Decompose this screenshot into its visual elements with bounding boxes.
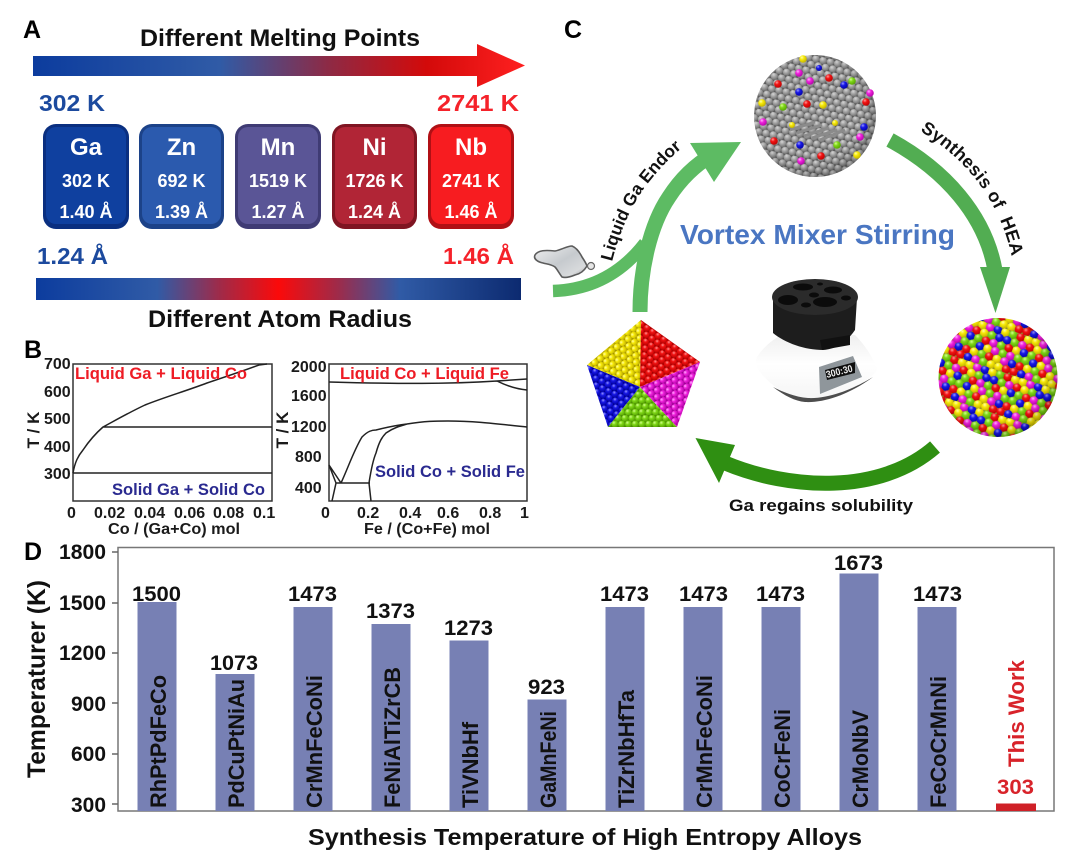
label D: D [24,538,42,566]
element card: Ni: Ni [362,134,386,161]
element card: Ni: 1.24 Å [348,202,401,222]
bar: this work 303: This Work [1004,659,1029,767]
chart: Ga-Co phase diagram: 500 [44,411,71,428]
chart: Co-Fe phase diagram: 800 [295,449,322,466]
panel D: synthesis temperature bar chart [23,538,1054,850]
element card: Zn [139,124,224,229]
chart: Ga-Co phase diagram: Liquid Ga + Liquid Co [75,365,247,383]
chart: Ga-Co phase diagram: 600 [44,384,71,401]
heading: different atom radius: Different Atom Radius [148,306,412,333]
bar: FeNiAlTiZrCB 1373: 1373 [366,600,415,623]
bar: RhPtPdFeCo 1500: 1500 [132,583,181,606]
bar: CrMoNbV 1673: CrMoNbV [848,710,873,808]
bar: TiVNbHf 1273 [444,617,493,811]
chart: Co-Fe phase diagram: 1600 [291,388,327,405]
chart: Ga-Co phase diagram: 300 [44,466,71,483]
bar: PdCuPtNiAu 1073: PdCuPtNiAu [224,679,249,808]
bar: CrMnFeCoNi 1473: 1473 [288,583,337,606]
chart: Co-Fe phase diagram: 0.8 [479,505,501,522]
element card: Ga: 1.40 Å [59,202,113,222]
bar: TiVNbHf 1273: 1273 [444,617,493,640]
element card: Zn: 692 K [157,171,206,191]
chart: Ga-Co phase diagram: 400 [44,439,71,456]
panel A: melting points and atom radius [23,16,525,333]
element card: Nb: 2741 K [442,171,500,191]
chart: Ga-Co phase diagram: 0 [67,505,76,522]
element card: Mn: 1519 K [249,171,307,191]
chart: Ga-Co phase diagram: 0.08 [213,505,244,522]
chart: Ga-Co phase diagram: 700 [44,356,71,373]
chart: Co-Fe phase diagram: 1200 [291,419,327,436]
icon: liquid gallium droplet [535,246,594,277]
chart: Co-Fe phase diagram: T / K [273,411,292,448]
chart: Co-Fe phase diagram: Fe / (Co+Fe) mol [364,521,490,538]
chart: Co-Fe phase diagram: Liquid Co + Liquid Fe [340,365,509,383]
arrow: melting point gradient [33,44,525,87]
y axis tick labels: 1200 [59,642,106,665]
bar: GaMnFeNi 923: GaMnFeNi [536,711,561,808]
chart: Ga-Co phase diagram: T / K [24,411,43,448]
chart: Ga-Co phase diagram: 0.02 [94,505,125,522]
label: Ga regains solubility: Ga regains solubility [729,496,914,515]
y axis tick labels: 600 [71,743,106,766]
bar: PdCuPtNiAu 1073: 1073 [210,652,258,675]
element card: Ni [332,124,417,229]
label B: B [24,336,42,364]
bar: PdCuPtNiAu 1073 [210,652,258,811]
bar: CoCrFeNi 1473 [756,583,805,811]
panel B: phase diagrams [24,336,529,538]
bar: CrMoNbV 1673: 1673 [834,552,883,575]
bar: this work 303 [996,659,1036,811]
y axis tick labels: 300 [71,794,106,817]
bar: CrMnFeCoNi 1473 [288,583,337,811]
high atom radius value: 1.46 Å [443,242,514,269]
icon: vortex mixer: 300:30 [825,364,854,381]
heading: different melting points: Different Melting Points [140,25,420,52]
element card: Nb [428,124,514,229]
chart: Co-Fe phase diagram: 0.6 [437,505,459,522]
bar: TiVNbHf 1273: TiVNbHf [458,721,483,808]
bar: GaMnFeNi 923 [528,676,566,811]
bar: this work 303: 303 [997,776,1034,799]
y axis ticks [112,552,118,804]
bar: CrMnFeCoNi 1473 second [679,583,728,811]
arrow: Ga regains solubility [696,438,935,483]
element card: Mn [235,124,321,229]
chart: Ga-Co phase diagram: 0.06 [174,505,205,522]
bar: CrMnFeCoNi 1473 second: CrMnFeCoNi [692,675,717,808]
element card: Nb: Nb [455,134,487,161]
chart: Co-Fe phase diagram: Solid Co + Solid Fe [375,463,525,481]
chart: Ga-Co phase diagram [24,356,275,538]
bar: CrMoNbV 1673 [834,552,883,811]
bar: TiZrNbHfTa 1473 [600,583,649,811]
chart: Co-Fe phase diagram: 0 [321,505,330,522]
bar: FeNiAlTiZrCB 1373 [366,600,415,811]
element card: Nb: 1.46 Å [444,202,498,222]
bar: CoCrFeNi 1473: 1473 [756,583,805,606]
chart frame [118,548,1054,811]
element card: Ga: 302 K [62,171,110,191]
chart: Co-Fe phase diagram [273,359,529,538]
low melting point value: 302 K [39,90,105,116]
chart: Ga-Co phase diagram: Solid Ga + Solid Co [112,481,265,499]
element card: Ni: 1726 K [345,171,404,191]
chart: Co-Fe phase diagram: 0.2 [357,505,379,522]
chart: Co-Fe phase diagram: 1 [520,505,529,522]
arrow: synthesis of HEA [890,140,1010,313]
bar: TiZrNbHfTa 1473: TiZrNbHfTa [614,689,639,808]
chart: Ga-Co phase diagram: Co / (Ga+Co) mol [108,521,240,538]
bar: CrMnFeCoNi 1473: CrMnFeCoNi [302,675,327,808]
element card: Mn: 1.27 Å [251,202,305,222]
bar: FeCoCrMnNi 1473: 1473 [913,583,962,606]
high melting point value: 2741 K [437,90,519,116]
multicolour high entropy alloy sphere [938,318,1058,437]
element card: Zn: 1.39 Å [155,202,208,222]
bar: GaMnFeNi 923: 923 [528,676,565,699]
grey nanoparticle sphere [754,55,876,177]
panel C: vortex mixer synthesis cycle [534,16,1058,515]
label C: C [564,16,582,44]
bar: RhPtPdFeCo 1500 [132,583,181,811]
title: vortex mixer stirring: Vortex Mixer Stirring [680,219,955,250]
chart: Co-Fe phase diagram: 400 [295,480,322,497]
x axis title: Synthesis Temperature of High Entropy Alloys [308,824,862,850]
element card: Zn: Zn [167,134,196,161]
label: liquid Ga endor: Liquid Ga Endor [600,141,680,261]
bar: TiZrNbHfTa 1473: 1473 [600,583,649,606]
low atom radius value: 1.24 Å [37,242,108,269]
y axis tick labels: 900 [71,693,106,716]
y axis tick labels: 1800 [59,541,106,564]
atom radius gradient bar [36,278,521,300]
label: synthesis of HEA: Synthesis of HEA [922,122,1022,256]
bar: FeCoCrMnNi 1473 [913,583,962,811]
segmented pentagon nanoparticle [587,320,700,427]
y axis title: Temperaturer (K) [23,580,51,778]
icon: vortex mixer [756,279,877,402]
chart: Co-Fe phase diagram: 0.4 [399,505,421,522]
label A: A [23,16,41,44]
chart: Ga-Co phase diagram: 0.04 [134,505,165,522]
element card: Ga: Ga [70,134,103,161]
arrow: liquid Ga endor [553,142,741,312]
bar: FeNiAlTiZrCB 1373: FeNiAlTiZrCB [380,667,405,808]
bar: FeCoCrMnNi 1473: FeCoCrMnNi [926,676,951,808]
chart: Co-Fe phase diagram: 2000 [291,359,327,376]
y axis tick labels [59,541,106,817]
element card: Mn: Mn [261,134,295,161]
chart: Ga-Co phase diagram: 0.1 [253,505,275,522]
bar: RhPtPdFeCo 1500: RhPtPdFeCo [146,675,171,808]
element card: Ga [43,124,129,229]
y axis tick labels: 1500 [59,592,106,615]
bar: CoCrFeNi 1473: CoCrFeNi [770,709,795,808]
bar: CrMnFeCoNi 1473 second: 1473 [679,583,728,606]
